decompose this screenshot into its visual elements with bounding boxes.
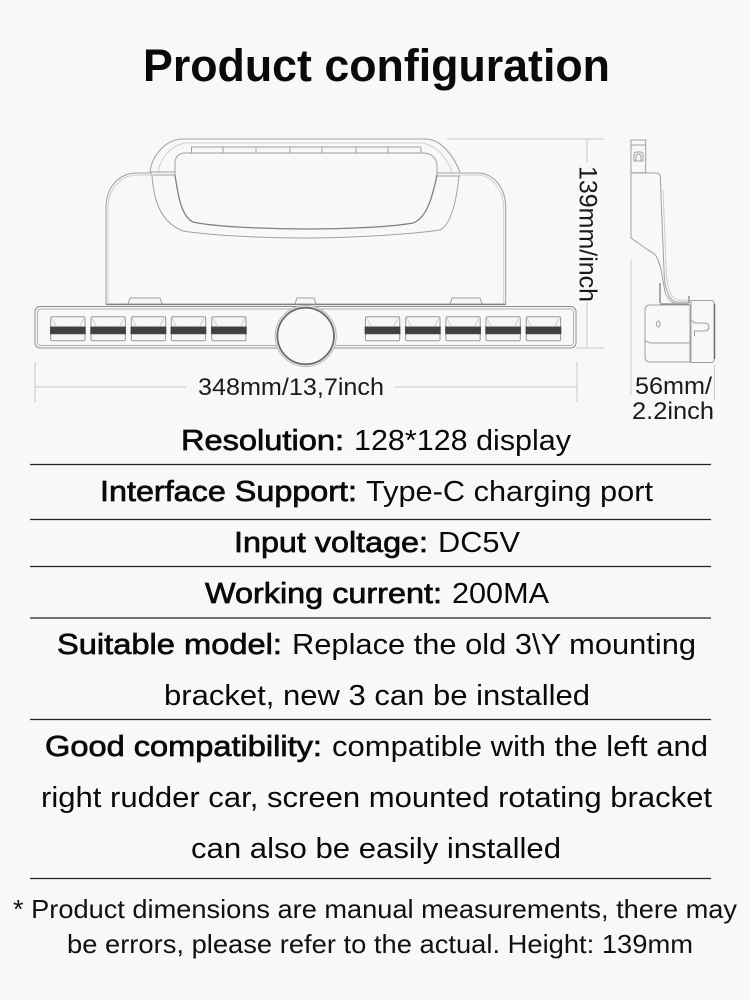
stand body	[106, 173, 506, 304]
top clip	[631, 140, 646, 173]
height label: 139mm/inch	[574, 166, 602, 302]
left ports	[50, 317, 247, 341]
depth dimension: 2.2inch	[632, 398, 714, 425]
spec: good compatibility: can also be easily installed	[191, 833, 561, 865]
right ports	[365, 317, 561, 341]
mount body	[645, 305, 690, 362]
spec: suitable model	[57, 629, 696, 712]
footnote: be errors, please refer to the actual. Height: 139mm	[67, 929, 693, 959]
height dimension	[447, 139, 604, 348]
width label: 348mm/13,7inch	[198, 374, 384, 401]
mount hole	[656, 321, 660, 327]
spec: suitable model: bracket, new 3 can be installed	[164, 680, 590, 712]
depth label: 56mm/	[635, 373, 712, 400]
spec: working current: Working current:	[205, 578, 442, 610]
handle	[150, 139, 460, 238]
spec: suitable model: Replace the old 3\Y mounting	[292, 629, 696, 661]
mount tabs	[128, 298, 482, 304]
depth dimension	[631, 260, 714, 425]
spec: working current	[205, 578, 550, 610]
spec: input voltage: Input voltage:	[234, 527, 428, 559]
spec: suitable model: Suitable model:	[57, 629, 282, 661]
spec: good compatibility: compatible with the left and	[332, 731, 708, 763]
round display	[275, 306, 336, 366]
spec: interface support	[100, 476, 653, 508]
spec: good compatibility: right rudder car, screen mounted rotating bracket	[41, 782, 712, 814]
spec: resolution	[181, 425, 572, 457]
spec: interface support: Type-C charging port	[366, 476, 653, 508]
width dimension	[35, 362, 577, 402]
spec: interface support: Interface Support:	[100, 476, 357, 508]
spec: resolution: 128*128 display	[354, 425, 572, 457]
footnote: * Product dimensions are manual measurements, there may	[13, 894, 737, 924]
product front view diagram	[35, 139, 576, 366]
side knob	[691, 300, 714, 362]
spec: resolution: Resolution:	[181, 425, 344, 457]
spec: input voltage	[234, 527, 521, 559]
title: Product configuration	[143, 40, 610, 91]
footnote	[13, 894, 737, 959]
spec: working current: 200MA	[452, 578, 550, 610]
spec: good compatibility: Good compatibility:	[45, 731, 322, 763]
product side view diagram	[631, 140, 714, 362]
spec: input voltage: DC5V	[438, 527, 521, 559]
LED bar	[35, 306, 576, 348]
arm	[631, 173, 688, 303]
spec: good compatibility	[41, 731, 712, 865]
